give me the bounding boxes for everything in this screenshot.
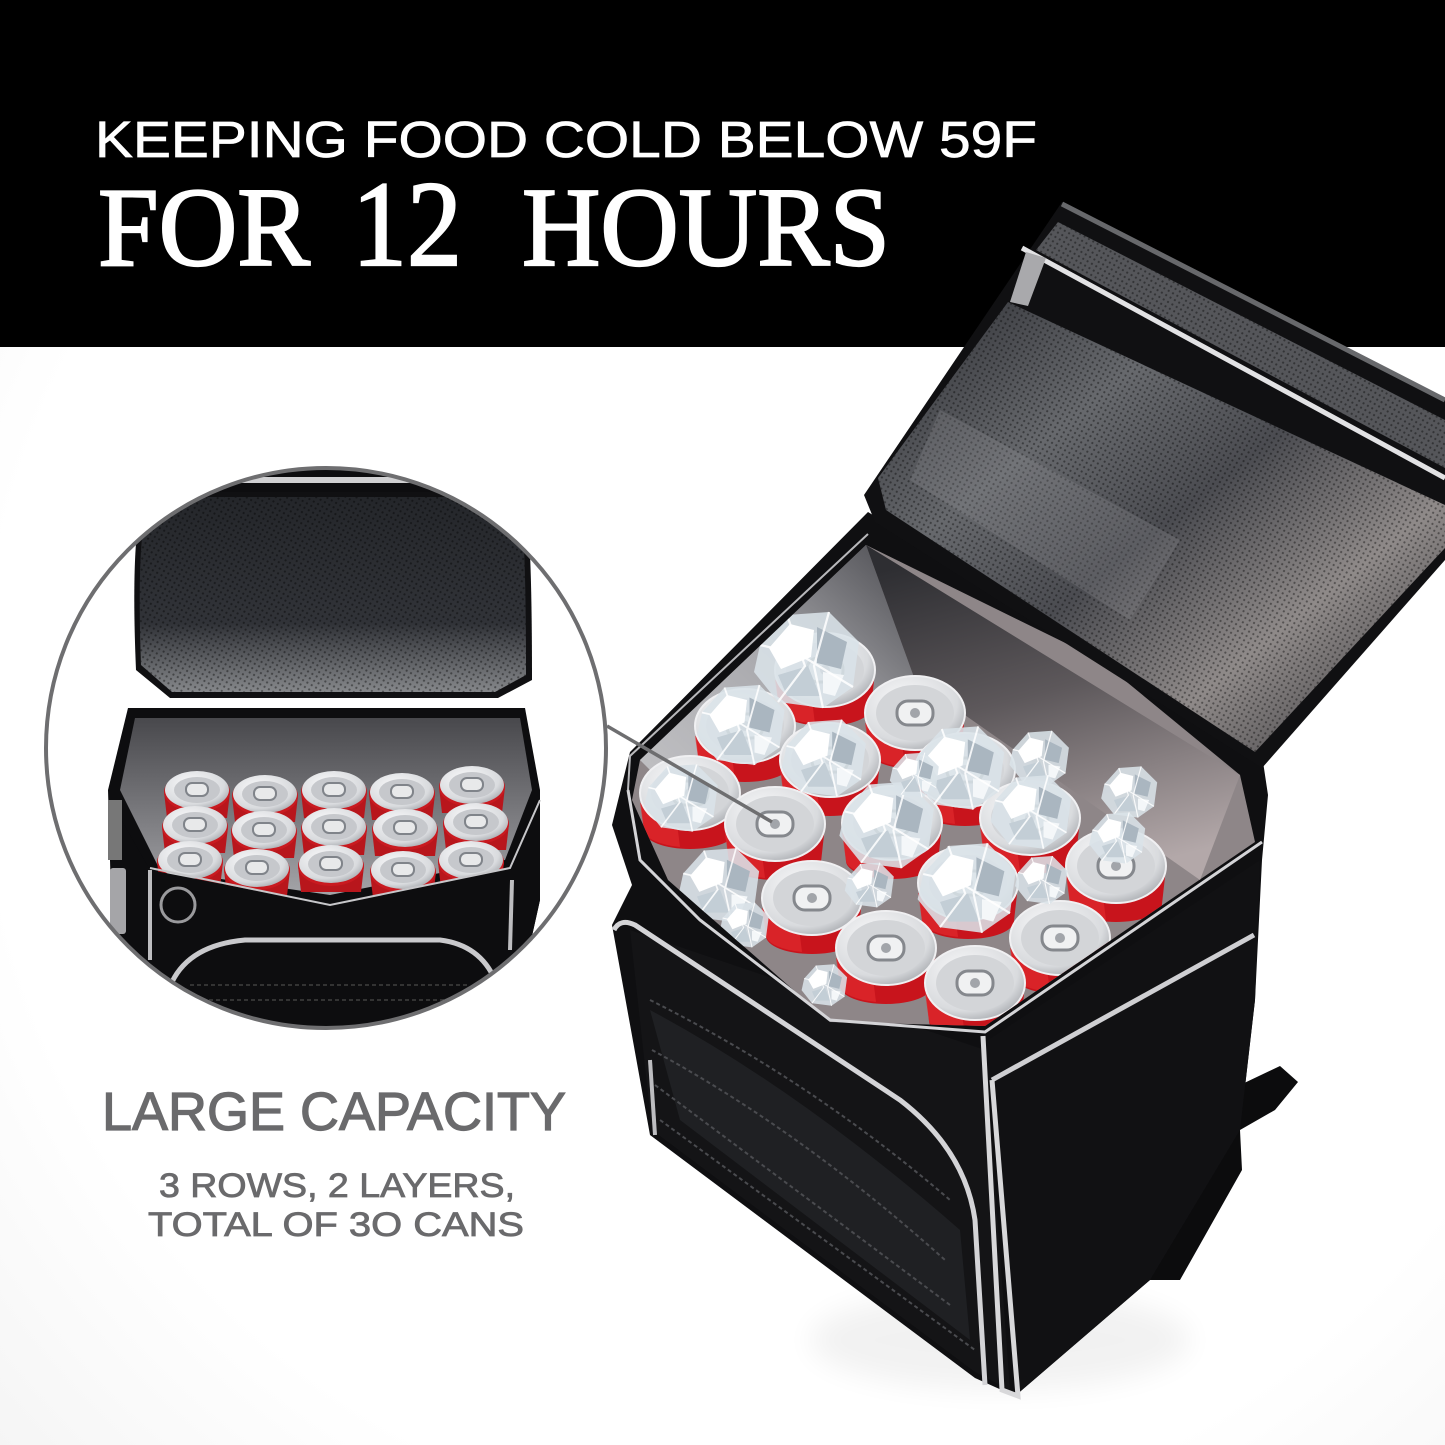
left face [630,930,1010,1390]
bag silhouette [612,512,1268,1396]
lid zipper [1022,248,1445,478]
title: KEEPING FOOD COLD BELOW 59F [95,111,1037,168]
capacity text: 3 ROWS, 2 LAYERS, [159,1167,515,1205]
title: HOURS [522,166,890,290]
bag shadow [810,1290,1190,1390]
right-face piping [992,935,1254,1080]
open lid [864,202,1445,768]
inset circle [46,462,606,1035]
interior walls [632,545,1255,1026]
capacity text: LARGE CAPACITY [102,1082,566,1142]
inset lid [134,492,532,698]
title: 12 [352,157,462,292]
header band [0,0,1445,347]
lid inner panel [878,302,1445,752]
callout line [607,726,772,822]
left-face piping [614,922,985,1385]
capacity text [102,1082,566,1244]
lid light patch [910,410,1180,620]
title: FOR [98,166,310,290]
capacity text: TOTAL OF 3O CANS [148,1206,524,1244]
inset hinge strip [218,470,434,492]
product: main cooler bag [612,202,1445,1396]
inset zip pull [108,800,122,860]
inset body [108,708,540,934]
front pocket stripes [650,1010,970,1340]
inset front flap [158,870,540,934]
right face [985,860,1260,1396]
title [95,111,1037,292]
zip rim [628,790,1262,1032]
lid top pocket [1036,222,1445,468]
lid zip pull [1010,252,1046,306]
rear strap [1150,1066,1298,1280]
cans and ice [640,612,1166,1039]
